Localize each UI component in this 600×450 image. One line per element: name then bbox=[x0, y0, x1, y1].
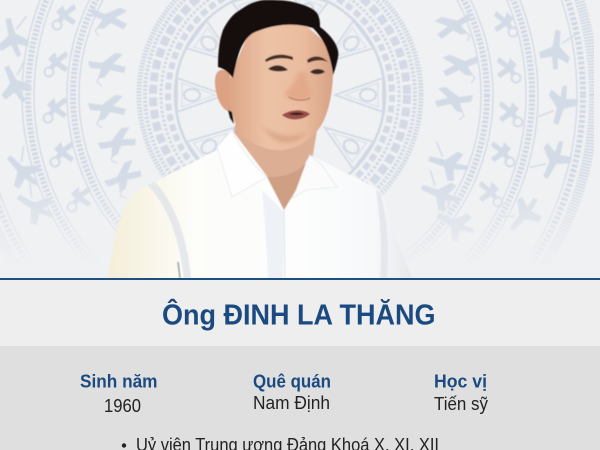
eyes bbox=[268, 65, 325, 74]
drum birds outer band bbox=[0, 15, 583, 240]
drum ring two bbox=[67, 0, 493, 308]
shirt bbox=[108, 130, 412, 278]
birth year bbox=[80, 372, 158, 416]
neck bbox=[232, 125, 318, 210]
ear bbox=[215, 70, 232, 112]
hometown: Quê quán bbox=[253, 372, 331, 392]
drum star panels bbox=[177, 0, 383, 198]
background fade bbox=[0, 0, 600, 279]
degree bbox=[434, 372, 488, 414]
details panel bbox=[0, 346, 600, 450]
drum ring three bbox=[22, 0, 538, 353]
birth year: Sinh năm bbox=[80, 372, 158, 392]
background panel bbox=[0, 0, 600, 279]
shirt shading bbox=[147, 182, 388, 278]
hometown: Nam Định bbox=[253, 393, 330, 413]
eyebrows bbox=[265, 55, 328, 63]
portrait photo bbox=[108, 0, 412, 278]
nose bbox=[285, 72, 312, 100]
hometown bbox=[253, 372, 331, 413]
mouth bbox=[282, 110, 310, 119]
drum birds middle band bbox=[44, 4, 522, 212]
shirt collar bbox=[217, 130, 267, 197]
name band bbox=[0, 280, 600, 346]
drum birds inner band bbox=[85, 1, 485, 248]
hair bbox=[218, 0, 338, 78]
degree: Học vị bbox=[434, 372, 487, 392]
divider line bbox=[0, 278, 600, 280]
face bbox=[230, 20, 333, 150]
drum central ring bbox=[139, 0, 421, 236]
cheek shading bbox=[262, 125, 306, 142]
degree: Tiến sỹ bbox=[434, 394, 488, 414]
birth year: 1960 bbox=[104, 396, 141, 416]
name title: Ông ĐINH LA THĂNG bbox=[162, 298, 436, 332]
